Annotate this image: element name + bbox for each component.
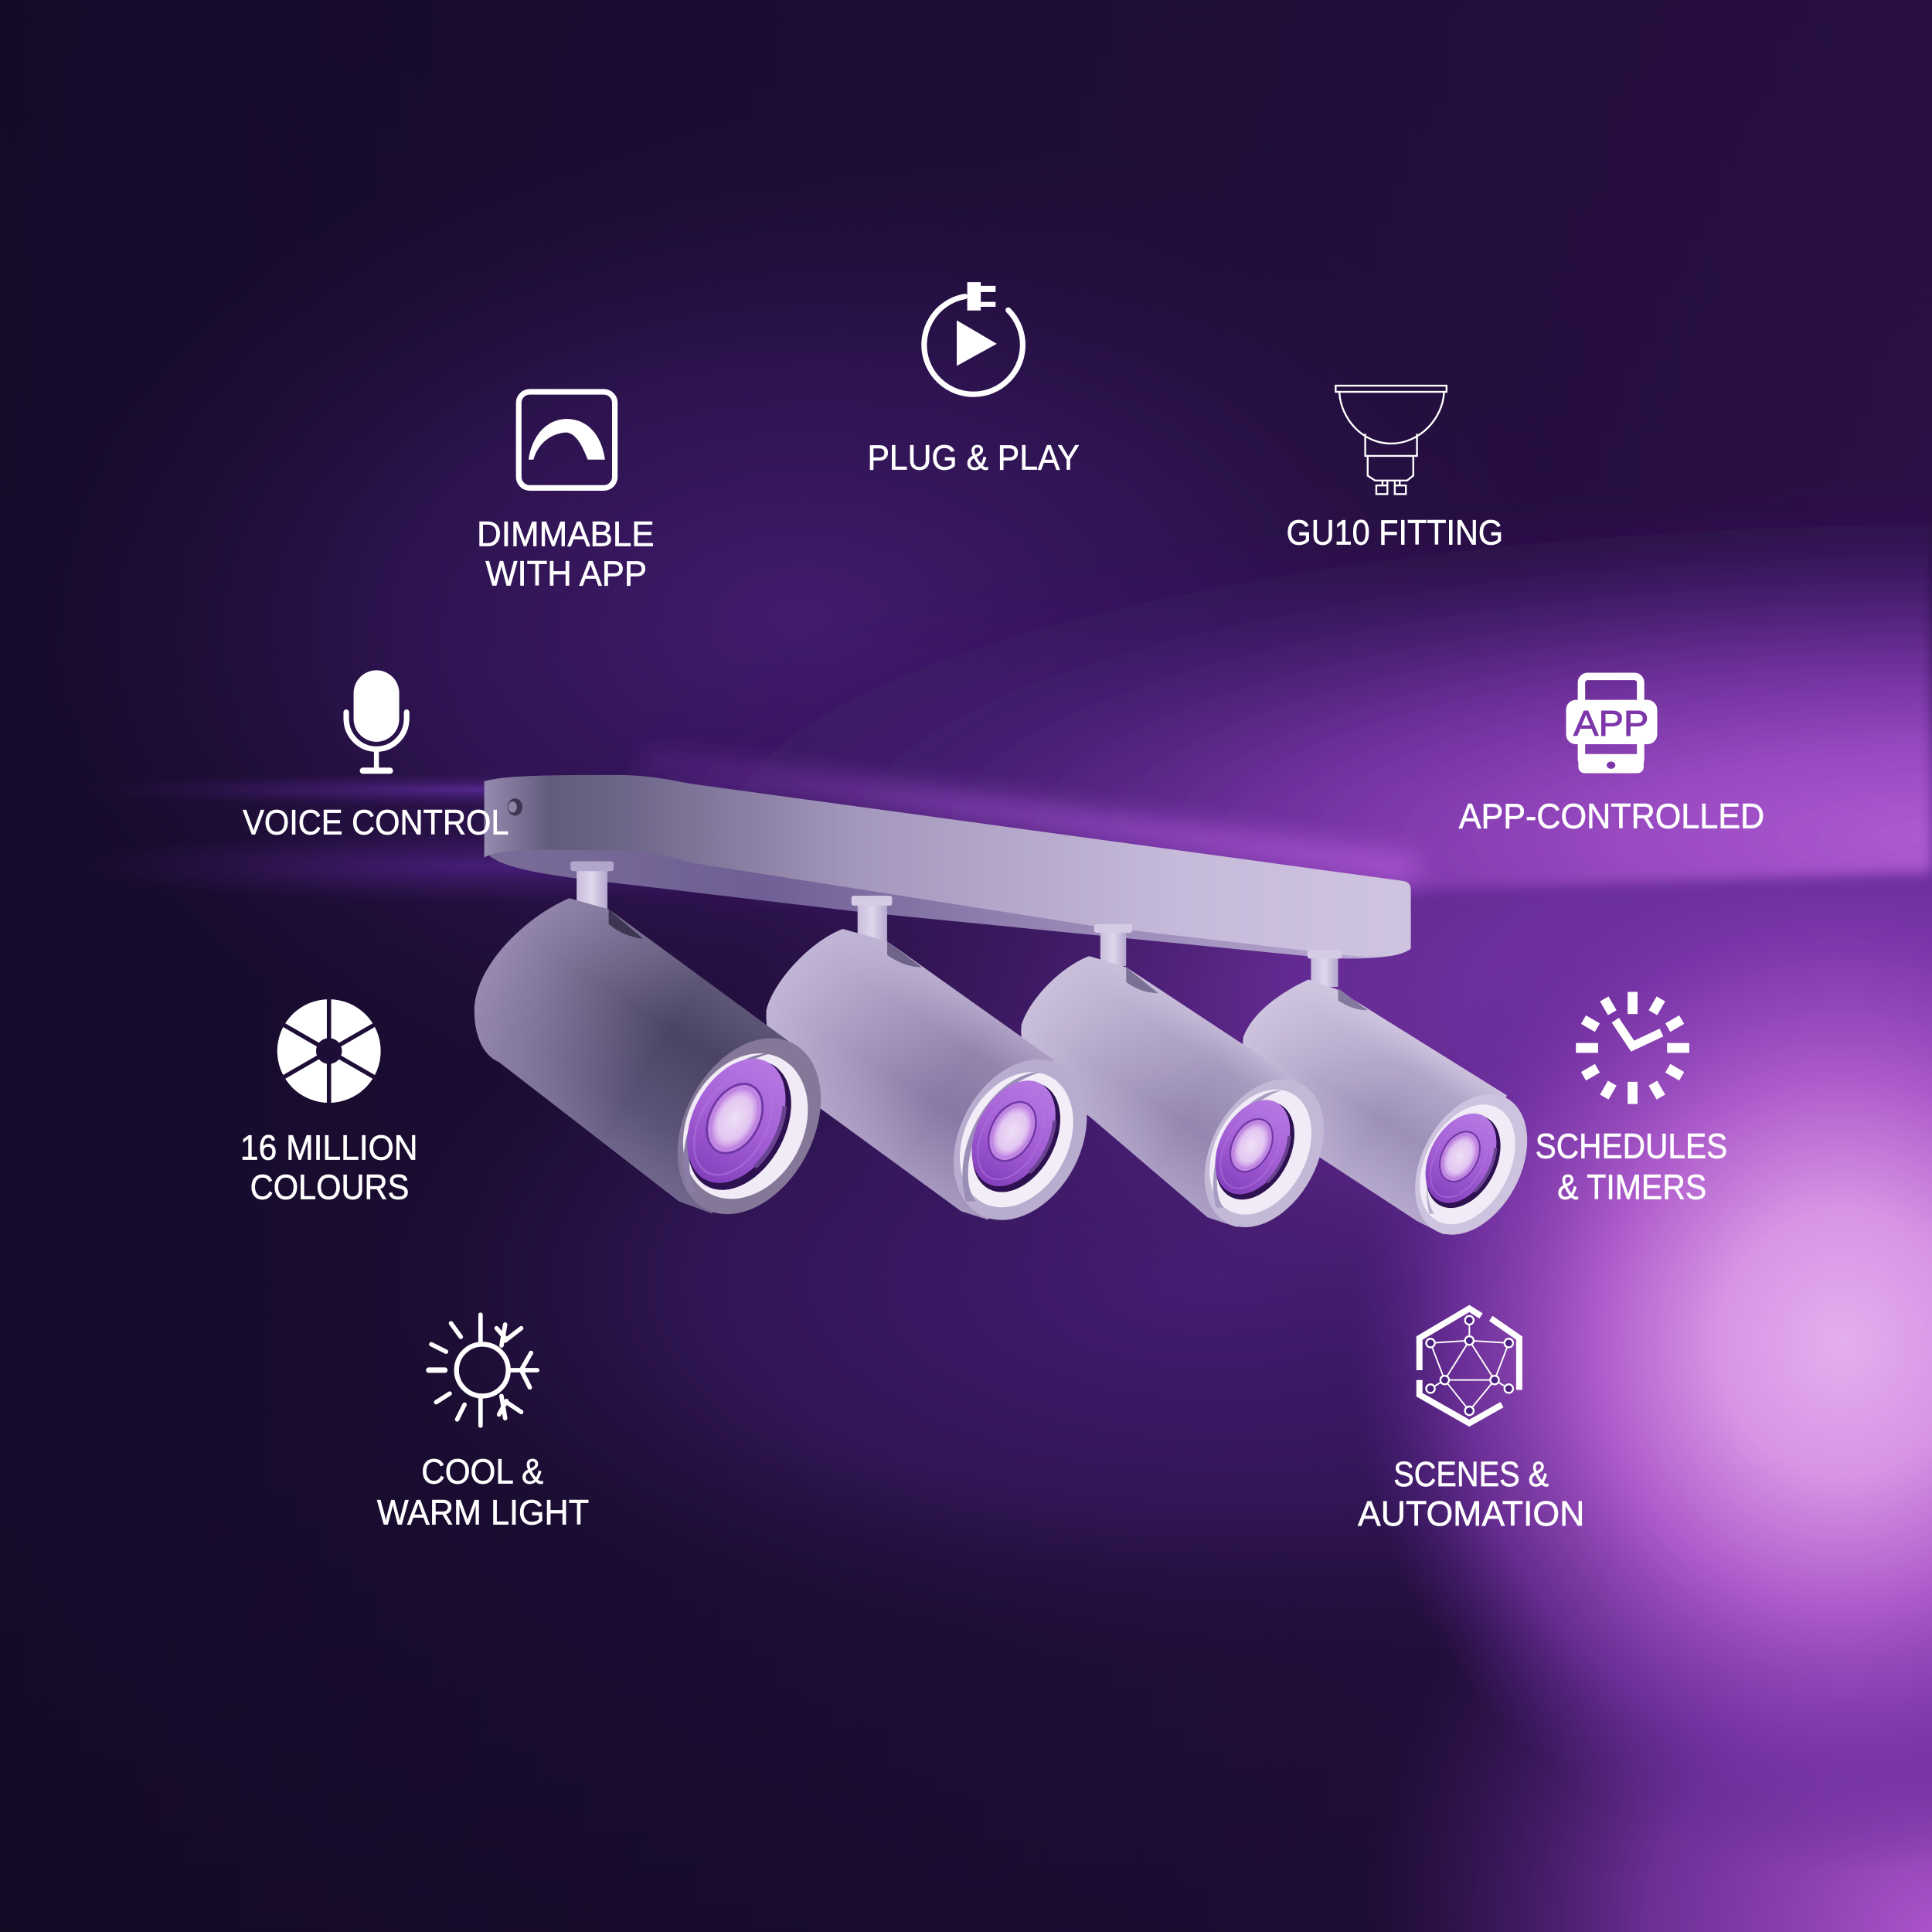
label: AUTOMATION bbox=[1358, 1494, 1584, 1533]
feature: schedules and timers bbox=[1536, 992, 1727, 1206]
label: VOICE CONTROL bbox=[243, 802, 509, 842]
label bbox=[1536, 1127, 1727, 1206]
feature: voice control bbox=[243, 670, 509, 842]
screw bbox=[508, 798, 522, 815]
label bbox=[1358, 1454, 1584, 1533]
icon: clock ticks and hands bbox=[1576, 992, 1689, 1104]
icon: dimmer dial bbox=[519, 392, 615, 488]
icon: microphone bbox=[346, 670, 406, 774]
label: GU10 FITTING bbox=[1287, 513, 1503, 553]
feature: plug and play bbox=[867, 282, 1080, 477]
label: APP-CONTROLLED bbox=[1459, 796, 1764, 835]
icon: tablet with APP banner: APP bbox=[1573, 703, 1648, 743]
label: DIMMABLE bbox=[477, 514, 655, 553]
ceiling spotlight fixture bbox=[474, 761, 1550, 1254]
label: & TIMERS bbox=[1557, 1167, 1706, 1206]
spotlight 1 bbox=[474, 898, 849, 1239]
label: PLUG & PLAY bbox=[867, 437, 1080, 477]
icon: half sun half snowflake bbox=[429, 1315, 537, 1426]
spotlight 3 bbox=[1021, 956, 1348, 1248]
icon: stopwatch with plug and play triangle bbox=[924, 282, 1022, 394]
spotlight 2 bbox=[766, 929, 1114, 1243]
label: SCENES & bbox=[1393, 1454, 1549, 1494]
label bbox=[477, 514, 655, 593]
feature: app-controlled bbox=[1459, 676, 1764, 835]
label: WARM LIGHT bbox=[377, 1492, 589, 1532]
label bbox=[240, 1128, 417, 1206]
feature: 16 million colours bbox=[240, 995, 417, 1206]
feature: GU10 fitting bbox=[1287, 386, 1503, 553]
glow above mounting bar bbox=[641, 761, 1417, 870]
stems bbox=[570, 861, 1342, 987]
feature: scenes and automation bbox=[1358, 1308, 1584, 1533]
icon: tablet with APP banner bbox=[1566, 676, 1657, 773]
feature: cool and warm light bbox=[377, 1315, 589, 1532]
feature: dimmable with app bbox=[477, 392, 655, 593]
label: COLOURS bbox=[250, 1167, 409, 1206]
label: WITH APP bbox=[485, 553, 647, 593]
label bbox=[377, 1452, 589, 1532]
label: 16 MILLION bbox=[240, 1128, 417, 1167]
label: SCHEDULES bbox=[1536, 1127, 1727, 1166]
label: COOL & bbox=[421, 1452, 543, 1492]
spotlight 4 bbox=[1243, 980, 1550, 1254]
icon: hexagon network bbox=[1420, 1308, 1519, 1423]
icon: colour wheel bbox=[277, 995, 381, 1107]
icon: GU10 bulb bbox=[1335, 386, 1447, 494]
mounting bar bbox=[485, 775, 1411, 958]
